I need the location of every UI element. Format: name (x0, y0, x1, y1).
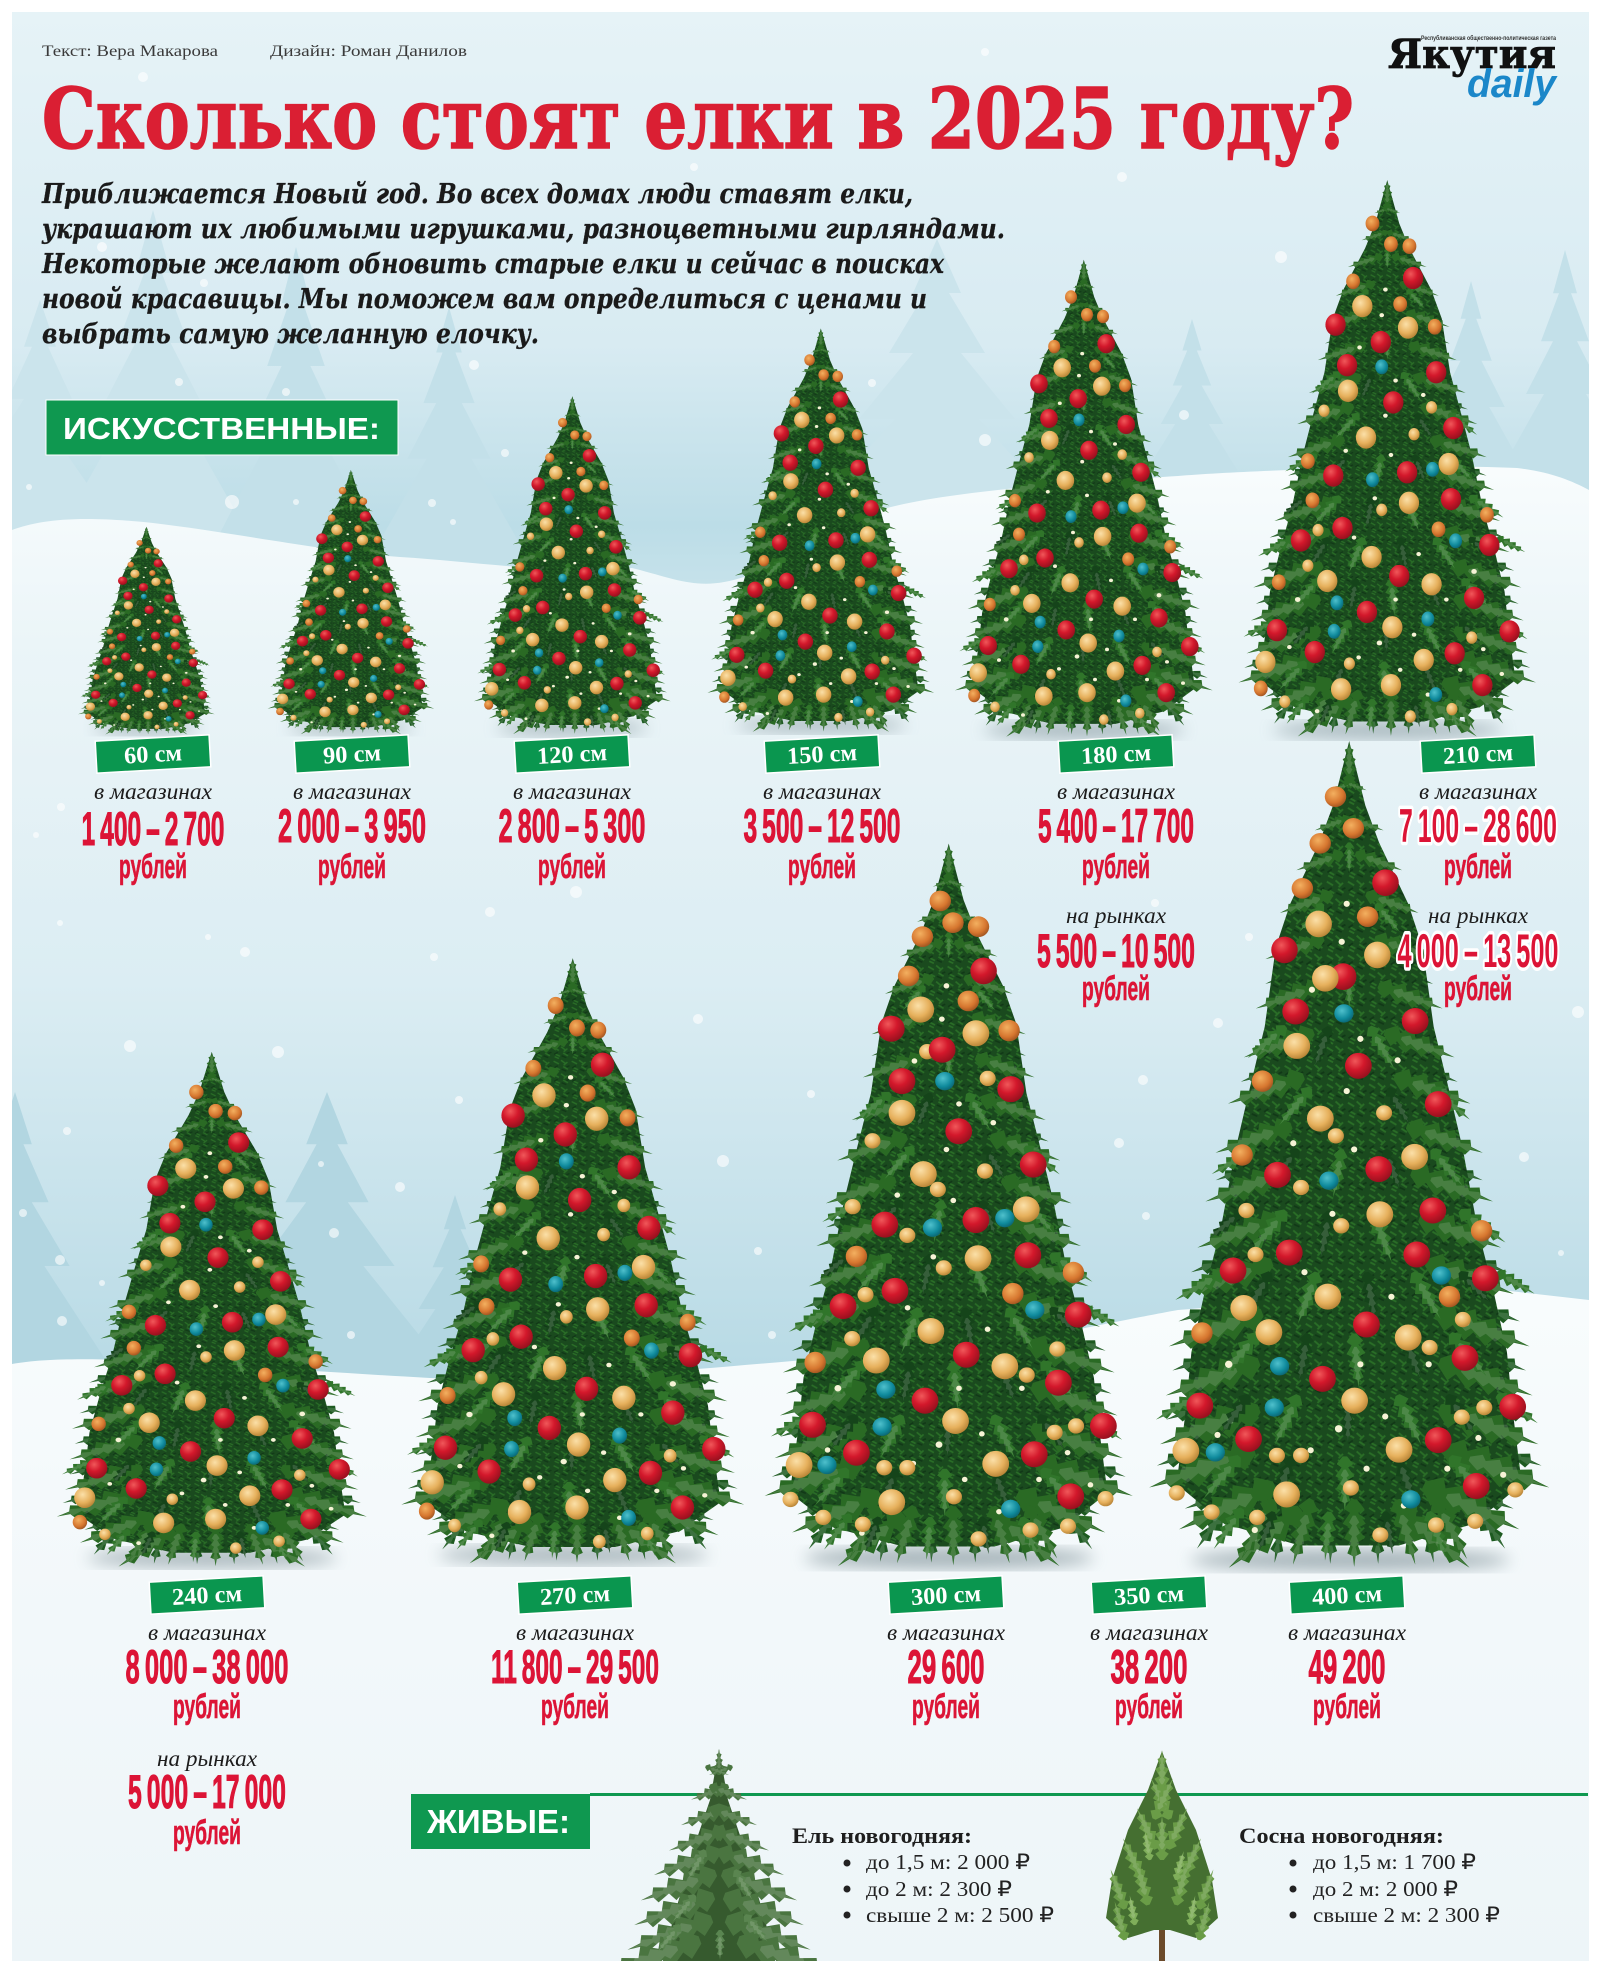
size label: 180 см (1058, 735, 1174, 773)
intro text (41, 179, 1005, 350)
price block: 210 cm: рублей (1444, 970, 1512, 1008)
logo: Якутия daily: Якутия (1388, 31, 1556, 78)
price block: 60 cm: 1 400 – 2 700 (82, 802, 224, 855)
price block: 150 cm: 3 500 – 12 500 (744, 799, 900, 852)
section heading: artificial: ИСКУССТВЕННЫЕ: (63, 411, 380, 446)
section heading: live trees with rule: ЖИВЫЕ: (426, 1803, 570, 1840)
size label: 120 см: 120 см (536, 740, 608, 770)
size label: 350 см (1091, 1576, 1207, 1614)
price block: 300 cm: рублей (912, 1688, 980, 1726)
price block: 180 cm (1037, 779, 1195, 1008)
price block: 210 cm (1398, 779, 1558, 1008)
price block: 350 cm: рублей (1115, 1688, 1183, 1726)
price block: 90 cm: в магазинах (293, 779, 412, 804)
size label: 60 см (95, 735, 211, 773)
tree: 300 cm (759, 844, 1139, 1577)
price block: 90 cm: рублей (318, 848, 386, 886)
price block: 90 cm: 2 000 – 3 950 (278, 799, 426, 852)
logo: Якутия daily: Республиканская общественно-политическая газета (1421, 35, 1557, 42)
size label: 60 см: 60 см (123, 740, 183, 770)
size label: 120 см (514, 735, 630, 773)
live spruce prices: свыше 2 м: 2 500 ₽ (866, 1903, 1054, 1927)
live spruce prices (792, 1823, 1054, 1927)
size label: 240 см: 240 см (171, 1581, 243, 1611)
price block: 180 cm: в магазинах (1057, 779, 1176, 804)
price block: 90 cm (278, 779, 426, 886)
section heading: artificial (46, 400, 398, 455)
price block: 120 cm: рублей (538, 848, 606, 886)
logo: Якутия daily: daily (1467, 62, 1558, 106)
price block: 60 cm: в магазинах (94, 779, 213, 804)
price block: 350 cm: в магазинах (1090, 1620, 1209, 1645)
price block: 180 cm: 5 500 – 10 500 (1037, 924, 1195, 977)
size label: 180 см: 180 см (1080, 740, 1152, 770)
icon: live spruce (621, 1749, 817, 1961)
intro text: украшают их любимыми игрушками, разноцветными гирляндами. (41, 214, 1005, 245)
price block: 400 cm: рублей (1313, 1688, 1381, 1726)
price block: 300 cm (887, 1620, 1006, 1726)
size label: 150 см: 150 см (786, 740, 858, 770)
size label: 210 см (1420, 735, 1536, 773)
price block: 300 cm: в магазинах (887, 1620, 1006, 1645)
tree: 120 cm (471, 396, 674, 739)
price block: 270 cm: 11 800 – 29 500 (491, 1640, 659, 1693)
price block: 150 cm (744, 779, 900, 886)
live pine prices (1239, 1823, 1500, 1927)
price block: 60 cm (82, 779, 224, 886)
tree: 240 cm (52, 1052, 372, 1574)
price block: 180 cm: рублей (1082, 848, 1150, 886)
price block: 210 cm: на рынках (1428, 903, 1529, 928)
live pine prices: свыше 2 м: 2 300 ₽ (1313, 1903, 1500, 1927)
price block: 150 cm: рублей (788, 848, 856, 886)
price block: 180 cm: на рынках (1066, 903, 1167, 928)
tree: 400 cm (1143, 741, 1556, 1580)
live spruce prices: Ель новогодняя: (792, 1823, 972, 1848)
credits: Текст: Вера Макарова (42, 43, 218, 60)
price block: 270 cm: в магазинах (516, 1620, 635, 1645)
price block: 120 cm: 2 800 – 5 300 (498, 799, 646, 852)
size label: 90 см (294, 735, 410, 773)
live spruce prices: до 1,5 м: 2 000 ₽ (866, 1850, 1030, 1874)
price block: 120 cm (498, 779, 646, 886)
price block: 180 cm: рублей (1082, 970, 1150, 1008)
price block: 240 cm (126, 1620, 288, 1852)
intro text: выбрать самую желанную елочку. (42, 319, 539, 350)
intro text: Приближается Новый год. Во всех домах люди ставят елки, (41, 179, 913, 210)
size label: 270 см: 270 см (539, 1581, 611, 1611)
tree: 180 cm (951, 260, 1217, 744)
intro text: новой красавицы. Мы поможем вам определиться с ценами и (42, 284, 927, 315)
live pine prices: Сосна новогодняя: (1239, 1823, 1444, 1848)
size label: 400 см: 400 см (1311, 1581, 1383, 1611)
price block: 240 cm: 8 000 – 38 000 (126, 1640, 288, 1693)
live spruce prices: до 2 м: 2 300 ₽ (866, 1877, 1012, 1901)
price block: 400 cm: в магазинах (1288, 1620, 1407, 1645)
price block: 120 cm: в магазинах (513, 779, 632, 804)
size label: 240 см (149, 1576, 265, 1614)
price block: 300 cm: 29 600 (908, 1640, 984, 1693)
price block: 210 cm: в магазинах (1419, 779, 1538, 804)
size label: 150 см (764, 735, 880, 773)
price block: 400 cm (1288, 1620, 1407, 1726)
price block: 350 cm: 38 200 (1110, 1640, 1188, 1693)
price block: 270 cm (491, 1620, 659, 1726)
price block: 210 cm: рублей (1444, 848, 1512, 886)
price block: 240 cm: на рынках (157, 1746, 258, 1771)
price block: 240 cm: 5 000 – 17 000 (128, 1765, 286, 1818)
price block: 240 cm: рублей (173, 1814, 241, 1852)
tree: 60 cm (76, 527, 217, 737)
live pine prices: до 2 м: 2 000 ₽ (1313, 1877, 1458, 1901)
price block: 240 cm: рублей (173, 1688, 241, 1726)
price block: 400 cm: 49 200 (1308, 1640, 1386, 1693)
tree: 150 cm (704, 328, 938, 738)
logo: Якутия daily (1388, 31, 1558, 106)
price block: 350 cm (1090, 1620, 1209, 1726)
size label: 400 см (1289, 1576, 1405, 1614)
price block: 270 cm: рублей (541, 1688, 609, 1726)
tree: 210 cm (1234, 180, 1541, 745)
price block: 180 cm: 5 400 – 17 700 (1038, 799, 1194, 852)
section heading: live trees with rule (411, 1793, 1588, 1849)
size label: 270 см (517, 1576, 633, 1614)
size label: 90 см: 90 см (322, 740, 382, 770)
icon: live pine (1104, 1750, 1220, 1961)
size label: 350 см: 350 см (1113, 1581, 1185, 1611)
size label: 300 см (888, 1576, 1004, 1614)
price block: 60 cm: рублей (119, 848, 187, 886)
size label: 210 см: 210 см (1442, 740, 1514, 770)
credits (42, 43, 468, 60)
size label: 300 см: 300 см (910, 1581, 982, 1611)
price block: 240 cm: в магазинах (148, 1620, 267, 1645)
tree: 90 cm (265, 470, 437, 738)
live pine prices: до 1,5 м: 1 700 ₽ (1313, 1850, 1476, 1874)
intro text: Некоторые желают обновить старые елки и сейчас в поисках (41, 249, 945, 280)
credits: Дизайн: Роман Данилов (270, 43, 468, 60)
tree: 270 cm (396, 958, 750, 1572)
price block: 150 cm: в магазинах (763, 779, 882, 804)
